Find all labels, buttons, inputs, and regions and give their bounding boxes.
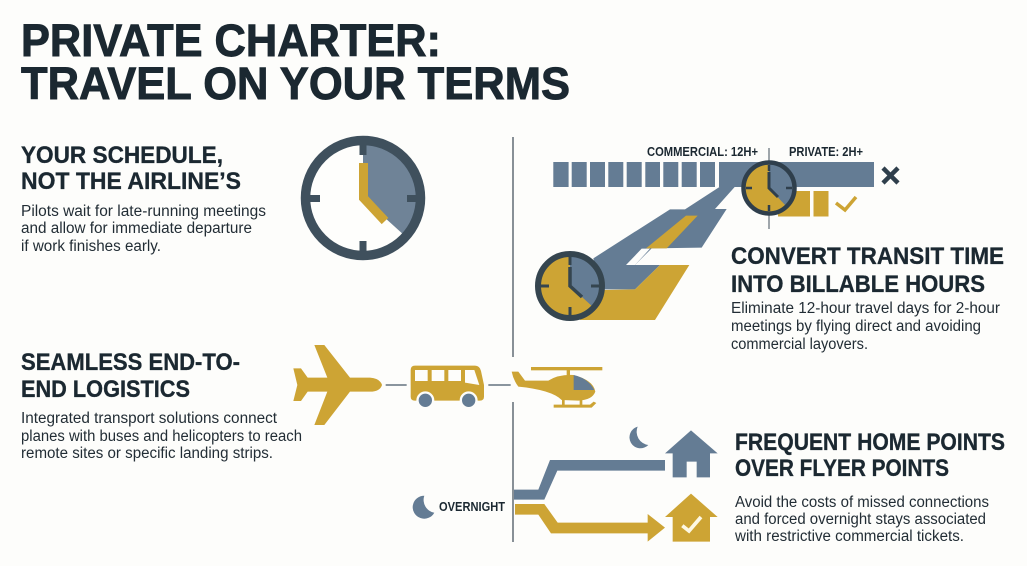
heading: your schedule: YOUR SCHEDULE, (21, 142, 223, 169)
icon: lower clock (538, 254, 603, 318)
icon: moon right (629, 427, 648, 448)
text block: seamless logistics: remote sites or specific landing strips. (21, 445, 273, 462)
heading: home points (735, 429, 1005, 482)
icon: timeline clock (744, 148, 794, 229)
icon: helicopter (512, 367, 602, 408)
text block: your schedule (21, 203, 266, 255)
icon: bus (411, 366, 484, 409)
heading: convert transit time: CONVERT TRANSIT TIME (731, 243, 1004, 270)
panel: seamless logistics (21, 345, 602, 462)
text block: your schedule: and allow for immediate departure (21, 220, 252, 237)
overnight label: OVERNIGHT (439, 500, 505, 514)
icon: check (836, 197, 856, 210)
connector: bus to helicopter (488, 382, 511, 387)
route: private (515, 504, 665, 542)
timeline labels (647, 145, 863, 159)
text block: convert transit time (731, 300, 1000, 353)
text block: your schedule: if work finishes early. (21, 238, 161, 255)
panel: convert transit time (538, 145, 1004, 353)
heading: convert transit time: INTO BILLABLE HOURS (731, 271, 985, 298)
icon: cross (883, 168, 898, 183)
connector: plane to bus (386, 382, 407, 387)
text block: home points: Avoid the costs of missed connections (735, 494, 989, 511)
icon: wall clock with elapsed wedge (306, 140, 420, 256)
text block: seamless logistics (21, 410, 302, 462)
text block: home points: with restrictive commercial tickets. (734, 528, 964, 545)
heading: seamless logistics: END LOGISTICS (21, 376, 190, 403)
icon: house gold with check (665, 494, 718, 542)
title: TRAVEL ON YOUR TERMS (21, 58, 570, 109)
text block: seamless logistics: planes with buses and helicopters to reach (21, 428, 302, 445)
panel: home points (413, 427, 1005, 545)
timeline labels: PRIVATE: 2H+ (789, 145, 863, 159)
icon: house blue (665, 430, 718, 477)
vertical divider (512, 137, 514, 542)
icon: moon left (413, 496, 434, 519)
route: commercial (514, 460, 665, 500)
heading: your schedule: NOT THE AIRLINE’S (21, 168, 241, 195)
route diagram (514, 427, 718, 542)
text block: convert transit time: Eliminate 12-hour travel days for 2-hour (731, 300, 1000, 317)
text block: your schedule: Pilots wait for late-running meetings (21, 203, 266, 220)
timeline labels: COMMERCIAL: 12H+ (647, 145, 758, 159)
title: PRIVATE CHARTER: (21, 15, 441, 66)
heading: home points: OVER FLYER POINTS (735, 455, 949, 482)
text block: home points (734, 494, 989, 545)
overnight label (413, 496, 505, 519)
text block: home points: and forced overnight stays associated (735, 511, 986, 528)
panel: your schedule (21, 140, 420, 256)
private timeline gold bars (778, 191, 828, 216)
text block: seamless logistics: Integrated transport solutions connect (21, 410, 278, 427)
icon: plane (293, 345, 382, 425)
heading: your schedule (21, 142, 241, 195)
heading: seamless logistics: SEAMLESS END-TO- (21, 349, 240, 376)
text block: convert transit time: commercial layovers. (731, 336, 868, 353)
title (21, 15, 570, 109)
transport icons (293, 345, 602, 425)
heading: convert transit time (731, 243, 1004, 298)
commercial timeline bar (553, 162, 874, 187)
heading: seamless logistics (21, 349, 240, 403)
text block: convert transit time: meetings by flying direct and avoiding (731, 318, 981, 335)
diverging flow ribbons (580, 187, 735, 320)
